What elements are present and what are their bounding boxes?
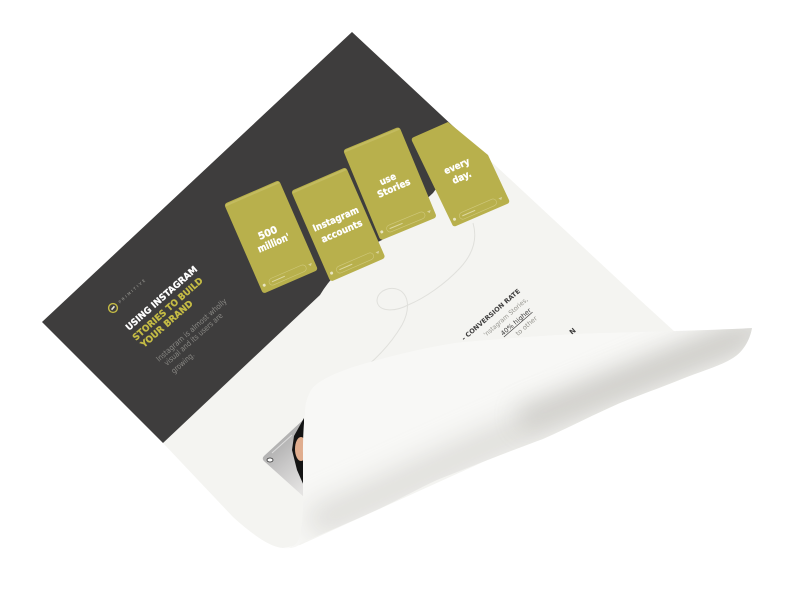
card 4 text: day. — [451, 169, 473, 187]
card 3 text: use — [378, 171, 398, 188]
card 4 text — [442, 156, 473, 187]
card 2 text: accounts — [320, 218, 365, 246]
conversion rate text: 40% higher — [499, 306, 533, 338]
story card 2 — [291, 167, 385, 282]
story card 1 — [224, 180, 318, 294]
conversion rate text: to other — [514, 314, 539, 338]
card 1 text: million' — [256, 232, 292, 256]
logo: Primitive — [109, 278, 147, 312]
paper curl — [283, 325, 770, 548]
sheet: light paper — [42, 32, 675, 548]
conversion rate text: N — [568, 327, 578, 337]
intro text — [154, 296, 229, 376]
dark header panel — [42, 32, 470, 443]
title: USING INSTAGRAM — [124, 264, 200, 333]
conversion rate text: 'nstagram Stories, — [482, 296, 530, 339]
decorative loop line — [367, 223, 475, 366]
card 2 text: Instagram — [311, 205, 361, 235]
intro text: growing. — [169, 350, 196, 376]
mockup of curled infographic page — [42, 32, 752, 548]
curl shading band — [310, 335, 750, 525]
photo corner — [263, 418, 307, 497]
conversion rate text — [460, 287, 578, 343]
story card 3 — [343, 127, 437, 241]
card 3 text: Stories — [376, 177, 413, 201]
card 4 details — [452, 195, 504, 223]
conversion rate text: - CONVERSION RATE — [460, 287, 522, 343]
story card 4 — [412, 122, 509, 226]
card 4 text: every — [442, 156, 472, 177]
title: YOUR BRAND — [138, 298, 196, 351]
intro text: Instagram is almost wholly — [154, 296, 229, 364]
title: STORIES TO BUILD — [131, 275, 206, 343]
card 2 text — [311, 205, 365, 246]
card 1 text: 500 — [257, 225, 279, 243]
intro text: visual and its users are — [162, 311, 225, 368]
logo: Primitive: PRIMITIVE — [117, 278, 147, 304]
